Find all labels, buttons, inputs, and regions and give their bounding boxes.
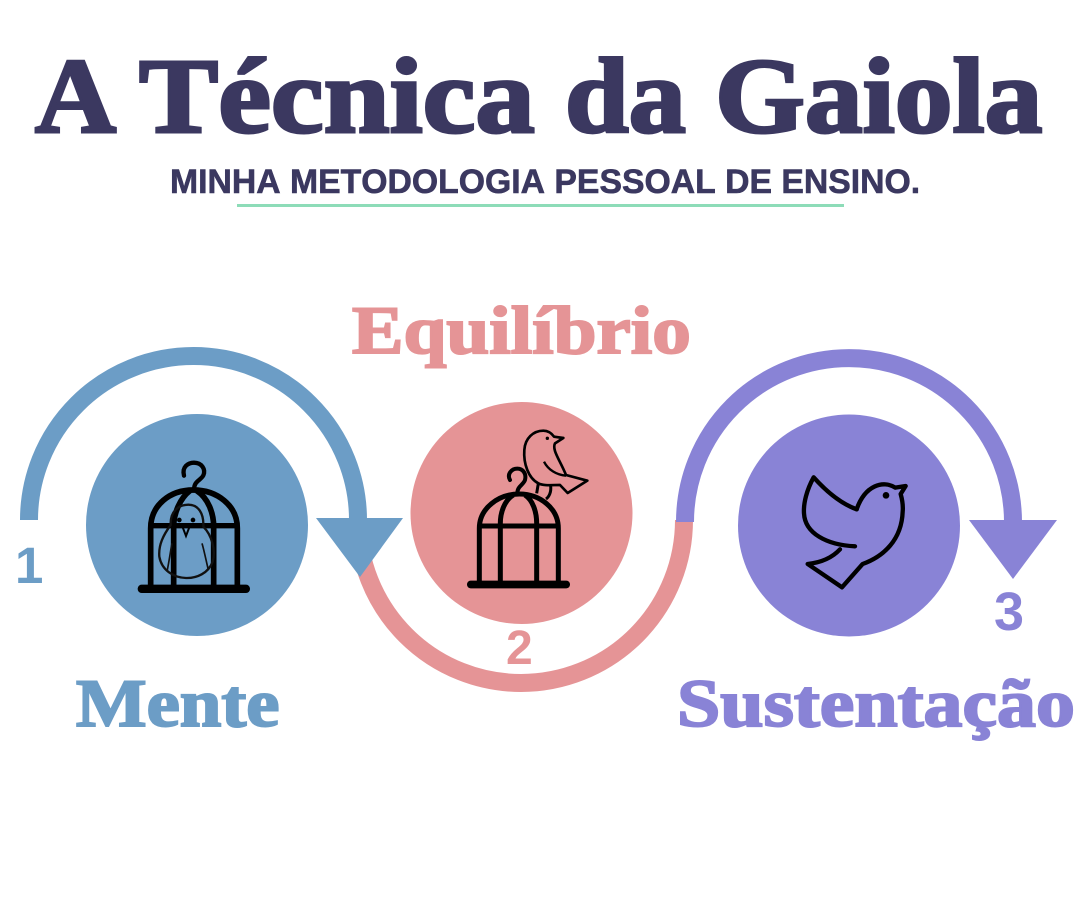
heading: Equilíbrio: Equilíbrio (352, 292, 691, 368)
step number 1: 1 (15, 537, 43, 594)
step 2: Equilíbrio circle with bird on cage (410, 402, 632, 624)
title: Técnica (139, 37, 535, 156)
title: da (565, 36, 686, 155)
step 3: Sustentação circle with free bird (738, 414, 960, 636)
step number 2: 2 (506, 622, 533, 675)
step 1: Mente circle with caged bird (86, 414, 308, 636)
icon: bird in cage (138, 463, 250, 593)
icon: flying bird (804, 477, 906, 587)
subtitle: MINHA METODOLOGIA PESSOAL DE ENSINO. (170, 163, 920, 201)
purple arc arrow (685, 358, 1057, 579)
title: Gaiola (715, 38, 1042, 156)
title: A (35, 36, 116, 155)
title (35, 36, 1042, 156)
pink arc (358, 520, 684, 683)
heading: Sustentação: Sustentação (677, 666, 1075, 741)
step number 3: 3 (994, 582, 1024, 642)
icon: bird on top of cage (467, 431, 587, 588)
blue arc arrow (29, 356, 403, 577)
subtitle underline (237, 204, 844, 207)
heading: Mente: Mente (76, 666, 279, 741)
